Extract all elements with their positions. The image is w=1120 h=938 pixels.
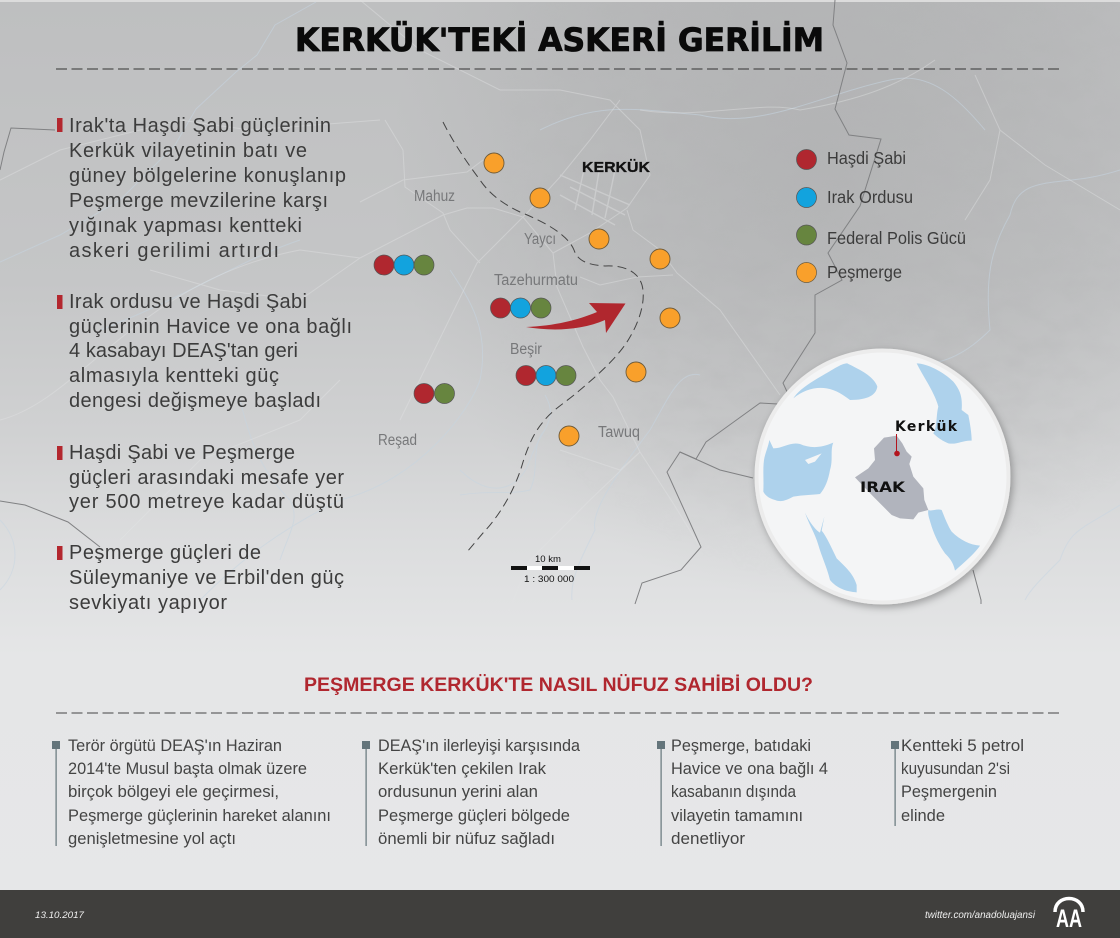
panel: column 2 bbox=[362, 737, 581, 848]
text block: point 2: güçlerinin Havice ve ona bağlı bbox=[69, 316, 352, 338]
country: Iraq bbox=[855, 436, 928, 519]
panel: column 4: elinde bbox=[901, 807, 945, 825]
text block: point 1: yığınak yapması kentteki bbox=[69, 215, 302, 237]
panel: column 1: genişletmesine yol açtı bbox=[68, 830, 236, 848]
text block: point 1: Irak'ta Haşdi Şabi güçlerinin bbox=[69, 115, 331, 137]
text block: point 4 bbox=[57, 542, 344, 614]
sea: Red Sea bbox=[805, 513, 857, 592]
legend item: Federal Polis Gücü: Federal Polis Gücü bbox=[827, 228, 966, 248]
legend item: Haşdi Şabi: Haşdi Şabi bbox=[827, 148, 906, 168]
panel: column 4: kuyusundan 2'si bbox=[901, 760, 1010, 778]
panel: column 1: Terör örgütü DEAŞ'ın Haziran bbox=[68, 737, 282, 755]
panel: column 3: denetliyor bbox=[671, 830, 746, 848]
footer social handle: twitter.com/anadoluajansi bbox=[925, 910, 1036, 921]
text block: point 3 bbox=[57, 442, 344, 513]
markers: group west bbox=[374, 255, 434, 275]
footer date: 13.10.2017 bbox=[35, 910, 85, 921]
arrow: advance bbox=[526, 303, 626, 333]
panel: column 2: Kerkük'ten çekilen Irak bbox=[378, 760, 547, 778]
text block: point 2: almasıyla kentteki güç bbox=[69, 365, 279, 387]
markers: Peşmerge positions bbox=[484, 153, 680, 446]
legend bbox=[796, 148, 966, 282]
title: KERKÜK'TEKİ ASKERİ GERİLİM bbox=[295, 21, 824, 59]
legend item: Peşmerge: Peşmerge bbox=[827, 262, 902, 282]
panel: column 3: kasabanın dışında bbox=[671, 783, 797, 801]
place labels: Yaycı bbox=[524, 231, 556, 248]
text block: point 3: yer 500 metreye kadar düştü bbox=[69, 491, 344, 513]
sea: Caspian bbox=[917, 363, 972, 444]
front line: dashed bbox=[443, 122, 643, 552]
panel: column 4: Kentteki 5 petrol bbox=[901, 737, 1024, 755]
text block: point 4: Peşmerge güçleri de bbox=[69, 542, 261, 564]
panel: column 2: Peşmerge güçleri bölgede bbox=[378, 807, 570, 825]
legend item: Haşdi Şabi bbox=[796, 148, 906, 170]
panel: column 1: 2014'te Musul başta olmak üzere bbox=[68, 760, 307, 778]
markers: group Reşad bbox=[414, 384, 454, 404]
map background bbox=[0, 0, 1120, 604]
panel: column 1: birçok bölgeyi ele geçirmesi, bbox=[68, 783, 279, 801]
text block: point 2: Irak ordusu ve Haşdi Şabi bbox=[69, 291, 307, 313]
place labels: Tawuq bbox=[598, 424, 640, 441]
text block: point 4: Süleymaniye ve Erbil'den güç bbox=[69, 567, 344, 589]
panel: column 1 bbox=[52, 737, 331, 848]
sea: Black Sea bbox=[793, 363, 877, 400]
panel: key points bbox=[57, 115, 352, 614]
place labels: Beşir bbox=[510, 341, 542, 358]
text block: point 2: dengesi değişmeye başladı bbox=[69, 390, 321, 412]
icon: AA logo: AA bbox=[1056, 905, 1082, 933]
inset label: Kerkük: Kerkük bbox=[895, 419, 958, 435]
inset label: Irak: IRAK bbox=[860, 480, 906, 496]
text block: point 3: güçleri arasındaki mesafe yer bbox=[69, 467, 344, 489]
scale bar: 10 km bbox=[535, 554, 561, 565]
text block: point 3: Haşdi Şabi ve Peşmerge bbox=[69, 442, 295, 464]
text block: point 1 bbox=[57, 115, 346, 262]
panel: column 3: vilayetin tamamını bbox=[671, 807, 803, 825]
panel: column 3: Havice ve ona bağlı 4 bbox=[671, 760, 828, 778]
text block: point 1: askeri gerilimi artırdı bbox=[69, 240, 279, 262]
inset locator map bbox=[754, 348, 1010, 604]
sea: Mediterranean bbox=[763, 440, 833, 501]
place labels: Reşad bbox=[378, 432, 417, 449]
text block: point 1: Kerkük vilayetinin batı ve bbox=[69, 140, 307, 162]
place labels: Tazehurmatu bbox=[494, 272, 578, 289]
icon: AA logo bbox=[1055, 898, 1083, 933]
text block: point 4: sevkiyatı yapıyor bbox=[69, 592, 227, 614]
subheading: PEŞMERGE KERKÜK'TE NASIL NÜFUZ SAHİBİ OLDU? bbox=[304, 673, 813, 696]
panel: column 3 bbox=[657, 737, 828, 848]
text block: point 1: Peşmerge mevzilerine karşı bbox=[69, 190, 328, 212]
legend item: Irak Ordusu: Irak Ordusu bbox=[827, 187, 913, 207]
Kerkük pointer bbox=[894, 434, 900, 456]
markers: group Tazehurmatu bbox=[490, 298, 551, 318]
text block: point 2 bbox=[57, 291, 352, 412]
panel: column 4 bbox=[891, 737, 1024, 826]
place labels bbox=[378, 188, 640, 449]
panel: column 2: ordusunun yerini alan bbox=[378, 783, 538, 801]
scale bar: 1 : 300 000 bbox=[524, 574, 574, 585]
legend item: Peşmerge bbox=[796, 262, 902, 282]
text block: point 1: güney bölgelerine konuşlanıp bbox=[69, 165, 346, 187]
footer bar bbox=[0, 890, 1120, 938]
city label: Kerkük: KERKÜK bbox=[582, 159, 651, 176]
markers: group Beşir bbox=[516, 366, 576, 386]
sea: Persian Gulf bbox=[928, 510, 980, 571]
panel: column 4: Peşmergenin bbox=[901, 783, 997, 801]
panel: column 1: Peşmerge güçlerinin hareket alanını bbox=[68, 807, 331, 825]
panel: column 3: Peşmerge, batıdaki bbox=[671, 737, 811, 755]
legend item: Irak Ordusu bbox=[796, 187, 913, 208]
scale bar bbox=[511, 554, 590, 585]
place labels: Mahuz bbox=[414, 188, 455, 205]
panel: column 2: önemli bir nüfuz sağladı bbox=[378, 830, 555, 848]
legend item: Federal Polis Gücü bbox=[796, 225, 966, 248]
text block: point 2: 4 kasabayı DEAŞ'tan geri bbox=[69, 340, 298, 362]
panel: column 2: DEAŞ'ın ilerleyişi karşısında bbox=[378, 737, 581, 755]
